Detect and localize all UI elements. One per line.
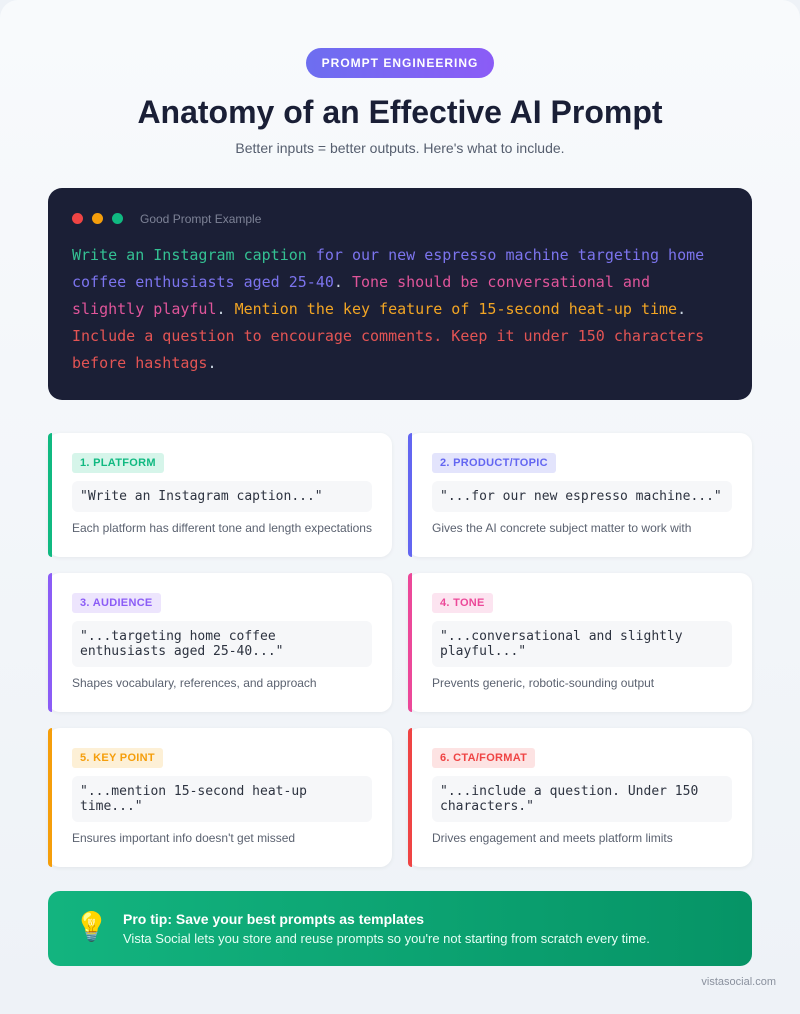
badge: prompt engineering: PROMPT ENGINEERING <box>322 56 478 70</box>
badge: prompt engineering <box>306 48 494 78</box>
tag <box>432 748 535 768</box>
card: cta <box>408 728 752 867</box>
subtitle: Better inputs = better outputs. Here's what to include. <box>235 140 565 156</box>
description: Ensures important info doesn't get missed <box>72 831 295 845</box>
quote <box>432 621 732 667</box>
description: Gives the AI concrete subject matter to work with <box>432 521 691 535</box>
quote <box>432 481 732 512</box>
tag <box>72 453 164 473</box>
tag <box>72 593 161 613</box>
tag: 4. TONE <box>440 597 485 609</box>
tag: 5. KEY POINT <box>80 752 155 764</box>
code label: Good Prompt Example <box>140 212 261 226</box>
prompt text: Write an Instagram caption for our new espresso machine targeting home coffee enthusiasts aged 25-40. Tone should be conversational and slightly playful. Mention the key feature of 15-second heat-up time. Include a question to encourage comments. Keep it under 150 characters before hashtags. <box>72 246 704 372</box>
quote: playful..." <box>440 644 526 659</box>
quote: "...mention 15-second heat-up <box>80 784 307 799</box>
description: Shapes vocabulary, references, and approach <box>72 676 317 690</box>
window dots <box>72 213 123 224</box>
tag: 2. PRODUCT/TOPIC <box>440 457 548 469</box>
quote: "Write an Instagram caption..." <box>80 489 323 504</box>
tag: 6. CTA/FORMAT <box>440 752 527 764</box>
quote: enthusiasts aged 25-40..." <box>80 644 284 659</box>
quote <box>72 481 372 512</box>
quote: characters." <box>440 799 534 814</box>
card: product <box>408 433 752 557</box>
tag <box>72 748 163 768</box>
quote: "...include a question. Under 150 <box>440 784 698 799</box>
description: Each platform has different tone and length expectations <box>72 521 372 535</box>
tip heading: Pro tip: Save your best prompts as templates <box>123 911 424 927</box>
quote <box>72 621 372 667</box>
icon: light bulb: 💡 <box>74 911 109 942</box>
quote: "...conversational and slightly <box>440 629 683 644</box>
title: Anatomy of an Effective AI Prompt <box>137 94 663 130</box>
tag <box>432 593 493 613</box>
panel: code example <box>48 188 752 400</box>
quote: time..." <box>80 799 143 814</box>
tag <box>432 453 556 473</box>
quote <box>72 776 372 822</box>
card: platform <box>48 433 392 557</box>
card: audience <box>48 573 392 712</box>
quote: "...targeting home coffee <box>80 629 276 644</box>
panel: pro tip <box>48 891 752 966</box>
description: Drives engagement and meets platform limits <box>432 831 673 845</box>
card: key point <box>48 728 392 867</box>
description: Prevents generic, robotic-sounding output <box>432 676 654 690</box>
tip text: Vista Social lets you store and reuse prompts so you're not starting from scratch every time. <box>123 931 650 946</box>
card: tone <box>408 573 752 712</box>
quote <box>432 776 732 822</box>
tag: 3. AUDIENCE <box>80 597 153 609</box>
tag: 1. PLATFORM <box>80 457 156 469</box>
quote: "...for our new espresso machine..." <box>440 489 722 504</box>
footer: vistasocial.com <box>701 976 776 988</box>
